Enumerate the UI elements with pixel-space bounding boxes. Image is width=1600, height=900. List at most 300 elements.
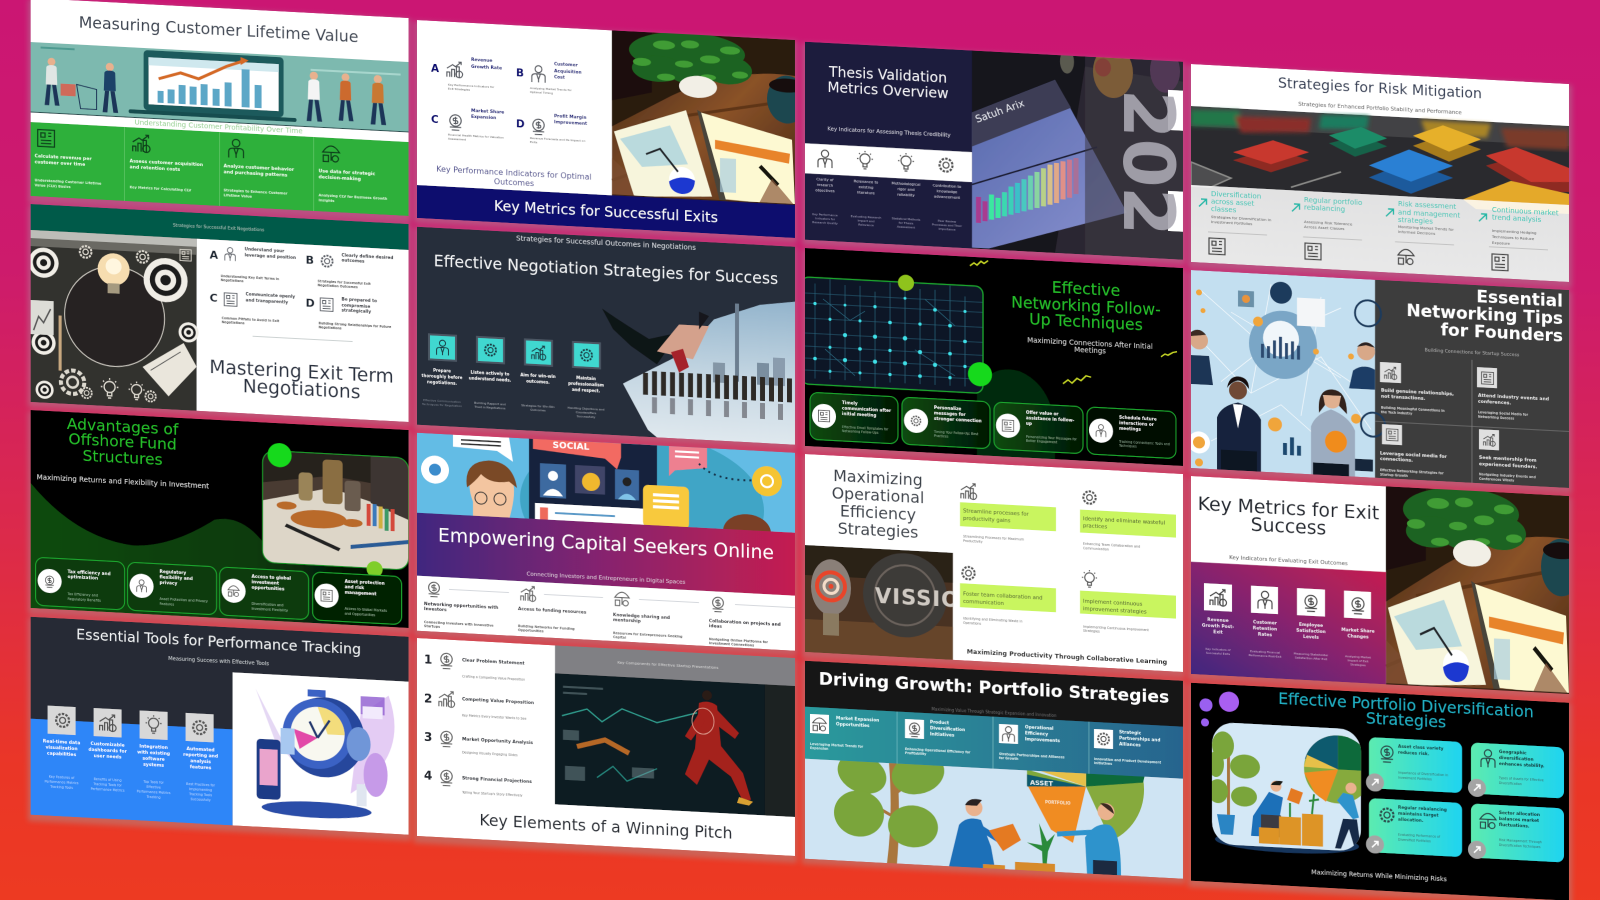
image: handshake and skyline (602, 291, 795, 445)
tools: four columns: Successfully (190, 797, 211, 802)
metrics list: D (516, 118, 525, 131)
cards: follow-up actions: meetings (1119, 426, 1141, 432)
heading: Key Elements of a Winning Pitch (479, 810, 733, 843)
image: data tablet: 202 (1107, 88, 1189, 238)
steps: four columns: Successfully (577, 414, 595, 419)
subheading: Strategies for Successful Outcomes in Negotiations (516, 234, 696, 252)
steps: four columns: understand needs. (469, 375, 512, 383)
list: negotiation points: B (306, 254, 314, 267)
cards: offshore fund benefits: management (345, 590, 376, 597)
columns: mitigation strategies: Continuous market (1492, 206, 1559, 217)
columns: four opportunities: ideas (709, 623, 722, 630)
cards: follow-up actions: Networking Follow-Ups (842, 429, 879, 435)
metrics list: C (431, 114, 439, 126)
image: target bulb and vision sign (805, 545, 959, 660)
band: four green columns: Assess customer acquisition (130, 158, 203, 168)
columns: four opportunities: mentorship (613, 617, 641, 625)
panel: Effective Portfolio Diversification Strategies (1191, 683, 1569, 900)
tools: four columns: software (142, 756, 165, 763)
band: four strategies (805, 707, 1183, 779)
columns: mitigation strategies (1199, 189, 1559, 273)
columns: criteria: Clarity of (816, 176, 834, 182)
columns: exit metrics: Customer (1253, 619, 1278, 627)
cards: follow-up actions: Tracking Connections: Tools and (1118, 440, 1170, 446)
image: target bulb and vision sign: VISSIO (875, 583, 959, 612)
cards: follow-up actions (810, 392, 1176, 459)
band: four strategies: Opportunities (836, 721, 870, 729)
subheading: Meetings (1074, 346, 1106, 355)
illustration: business people and network (1188, 270, 1385, 478)
blue block (31, 719, 233, 825)
grid: networking tips: Navigating Industry Events and (1479, 472, 1536, 479)
columns: four opportunities: Resources for Entrepreneurs Seeking (613, 631, 683, 639)
numbered list: Telling Your Startup's Story Effectively (461, 790, 522, 798)
columns: mitigation strategies: Techniques to Reduce (1491, 234, 1535, 241)
tools: four columns: reporting and (183, 752, 218, 760)
band: four green columns: decision-making (319, 174, 361, 182)
band: four strategies: Improvements (1025, 736, 1060, 744)
band: four strategies: Product (930, 719, 949, 726)
panel: Essential Networking Tips for Founders (1188, 270, 1569, 488)
cards: diversification rules: maintains target (1398, 811, 1439, 819)
columns: criteria (812, 176, 963, 232)
icon band (805, 143, 972, 182)
metrics list: Customer (554, 61, 579, 69)
heading: Effective Negotiation Strategies for Success (434, 251, 778, 288)
cards: follow-up actions: initial meeting (842, 411, 876, 418)
cards: diversification rules: allocation. (1398, 817, 1424, 824)
columns: four opportunities (424, 581, 795, 650)
columns: mitigation strategies: Risk assessment (1398, 200, 1456, 211)
illustration: growing coins and pie (1208, 722, 1372, 857)
cards: follow-up actions: Effective Email Templates for (842, 425, 889, 431)
steps: four columns: Building Rapport and (474, 401, 506, 406)
highlight boxes: improvement strategies (1083, 606, 1147, 616)
panel: Advantages of Offshore Fund Structures (31, 410, 409, 628)
columns: exit metrics: Successful Exits (1206, 651, 1230, 656)
columns: criteria: Evaluating Research (851, 214, 881, 220)
list: negotiation points: Be prepared to (342, 296, 377, 303)
cards: diversification rules: Diversified Portfolios (1398, 838, 1431, 843)
columns: mitigation strategies: across asset (1211, 198, 1255, 208)
columns: mitigation strategies: Across Asset Classes (1304, 224, 1344, 231)
subheading: Maximizing Value Through Strategic Expansion and Innovation (931, 706, 1057, 718)
illustration: laptop chart and shoppers (31, 42, 409, 132)
subheading: Strategies for Enhanced Portfolio Stability and Performance (1298, 102, 1462, 116)
tools: four columns: systems (143, 762, 164, 769)
tools: four columns (43, 705, 218, 803)
metrics list: Optimal Timing (530, 90, 553, 95)
list: negotiation points: Clearly define desired (342, 252, 393, 260)
list: negotiation points: Negotiations (222, 320, 245, 325)
list: negotiation points: outcomes (342, 257, 365, 264)
steps: four columns: Handling Objections and (568, 406, 604, 412)
columns: mitigation strategies: trend analysis (1492, 213, 1542, 224)
metrics list: Revenue Forecasts and Its Impact on (530, 136, 586, 143)
columns: exit metrics: Strategies (1350, 662, 1366, 667)
accent circles (1200, 690, 1239, 728)
image: coloured risk blocks (1191, 106, 1569, 282)
columns: criteria: Research Quality (812, 220, 838, 225)
columns: exit metrics: Impact of Exit (1348, 658, 1369, 663)
tools: four columns: Tracking Tools (49, 785, 73, 790)
cards: follow-up actions: assistance in follow- (1026, 415, 1074, 423)
columns: exit metrics (1202, 583, 1375, 668)
cards: offshore fund benefits: and risk (345, 584, 364, 591)
subheading: Connecting Investors and Entrepreneurs in Digital Spaces (527, 571, 686, 586)
panel: Effective Negotiation Strategies for Success (417, 227, 795, 445)
band: four strategies: Profitability (905, 751, 927, 756)
cards: diversification rules: balances market (1499, 816, 1539, 824)
illustration: stopwatch (233, 672, 409, 835)
band: four strategies: Initiatives (930, 731, 955, 739)
supporting notes: Productivity (963, 539, 983, 544)
band: four strategies: Strategic (1119, 729, 1142, 737)
cards: offshore fund benefits: Access to Global Markets (345, 607, 387, 613)
heading: Advantages of (67, 415, 179, 439)
metrics list: Improvement (554, 119, 587, 127)
numbered list: 3 (424, 730, 432, 744)
list: negotiation points: D (306, 297, 315, 310)
band: four green columns: and purchasing patterns (224, 169, 288, 179)
columns: mitigation strategies: rebalancing (1304, 203, 1345, 214)
columns: exit metrics: Levels (1303, 634, 1319, 641)
title band (805, 661, 1183, 727)
cards: offshore fund benefits: flexibility and (160, 574, 193, 582)
cards: offshore fund benefits: Diversification and (252, 602, 283, 607)
supporting notes: Streamlining Processes for Maximum (963, 534, 1024, 542)
list: negotiation points: Strategies for Successful Exit (318, 279, 371, 286)
metrics list: Market Share (471, 108, 504, 116)
tools: four columns: Benefits of Using (94, 777, 122, 783)
heading: Strategies (1366, 708, 1446, 732)
steps: four columns: Aim for win-win (520, 372, 556, 379)
heading: Strategies for Risk Mitigation (1278, 76, 1482, 102)
squiggles (970, 260, 1177, 390)
columns: exit metrics: Growth Post- (1202, 623, 1234, 630)
list: negotiation points: Building Strong Relationships for Future (319, 321, 391, 329)
cards: diversification rules: Evaluating Performance of (1398, 833, 1441, 839)
metrics list: Revenue (471, 57, 492, 64)
cards: diversification rules: enhances stability. (1499, 761, 1545, 769)
highlight boxes: Implement continuous (1083, 599, 1143, 608)
cards: diversification rules: Geographic (1499, 749, 1527, 756)
columns: exit metrics: Satisfaction After Exit (1295, 655, 1328, 661)
panel: Thesis Validation Metrics Overview (805, 30, 1189, 260)
steps: four columns: professionalism (568, 381, 604, 388)
cards: follow-up actions: Schedule future (1119, 415, 1157, 422)
cards: offshore fund benefits: Tax Efficiency and (67, 592, 98, 598)
metrics list: Acquisition (554, 68, 582, 76)
heading: Measuring Customer Lifetime Value (79, 13, 358, 46)
columns: four opportunities: Investors (424, 606, 447, 613)
subheading: Maximizing Connections After Initial (1027, 336, 1153, 351)
cards: follow-up actions: communication after (842, 405, 892, 413)
metrics list: Exits (530, 140, 538, 144)
columns: four opportunities: Opportunities (518, 628, 544, 633)
list: negotiation points: Negotiations (221, 278, 244, 283)
numbered list: Competing Value Proposition (462, 696, 534, 706)
columns: criteria: Contribution to (933, 182, 962, 189)
columns: mitigation strategies: Informed Decisions (1398, 229, 1435, 236)
columns: exit metrics: Rates (1258, 632, 1272, 638)
tools: four columns: Customizable (91, 741, 125, 749)
columns: four opportunities: Collaboration on projects and (709, 618, 781, 628)
image: data tablet (972, 39, 1189, 260)
panel: Driving Growth: Portfolio Strategies (805, 661, 1183, 879)
columns: criteria: Impact and (858, 218, 875, 223)
steps: four columns: and respect. (572, 387, 601, 393)
grid: networking tips: Build genuine relationships, (1381, 388, 1454, 397)
grid: networking tips: Building Meaningful Connections in (1381, 406, 1445, 413)
cards: offshore fund benefits: Access to global (252, 574, 291, 582)
columns: four opportunities: Networking opportunities with (424, 601, 498, 611)
columns: criteria: advancement (934, 194, 961, 200)
tools: four columns: Performance Metrics (137, 789, 171, 795)
columns: mitigation strategies: classes (1211, 205, 1237, 214)
cards: offshore fund benefits: Tax efficiency and (68, 569, 111, 577)
tools: four columns: Implementing (189, 787, 212, 792)
numbered list: 4 (424, 768, 432, 783)
list: negotiation points (210, 244, 393, 333)
highlight boxes: Foster team collaboration and (963, 591, 1043, 602)
image: light bulb and targets (29, 230, 199, 411)
tools: four columns: features (190, 764, 212, 771)
band: four green columns: Strategies to Enhance Customer (224, 188, 288, 196)
columns: criteria: Assessment (897, 225, 916, 230)
numbered list: 2 (424, 691, 432, 706)
metrics list: A (431, 63, 440, 75)
columns: criteria: rigor and (897, 186, 915, 192)
numbered list: Market Opportunity Analysis (462, 736, 533, 746)
cards: diversification rules: Investment Portfolios (1398, 776, 1432, 781)
panel: Maximizing Operational Efficiency Strategies (805, 454, 1183, 672)
cards: diversification rules: diversification (1499, 755, 1534, 763)
supporting notes: Operations (963, 621, 981, 626)
heading: Strategies (838, 519, 918, 542)
columns: four opportunities: Access to funding resources (518, 606, 587, 616)
cards: diversification rules: Risk Management Through (1499, 838, 1542, 844)
cards: offshore fund benefits: opportunities (252, 585, 285, 592)
metrics list: Cost (554, 74, 565, 81)
heading: Mastering Exit Term (209, 357, 394, 388)
cards: follow-up actions: Personalize (934, 405, 961, 411)
grid: networking tips: Effective Networking Strategies for (1380, 468, 1444, 475)
heading: Key Metrics for Successful Exits (494, 199, 718, 226)
supporting notes: Enhancing Team Collaboration and (1083, 542, 1140, 549)
tools: four columns: Top Tools for (142, 780, 164, 785)
band: four strategies: Innovation and Product Development (1094, 757, 1162, 765)
list: negotiation points: Common Pitfalls to Avoid in Exit (222, 316, 280, 323)
columns: mitigation strategies: strategies (1398, 216, 1433, 226)
cards: diversification rules: Diversification Techniques (1499, 843, 1541, 849)
cards: diversification rules: Regular rebalancing (1398, 805, 1447, 813)
band: four strategies: Efficiency (1025, 730, 1048, 738)
illustration: social media people: SOCIAL (553, 441, 590, 453)
tools: four columns: Effective (146, 785, 161, 790)
columns: mitigation strategies: and management (1398, 208, 1460, 220)
heading: Up Techniques (1029, 309, 1143, 334)
subheading: Measuring Success with Effective Tools (168, 656, 269, 667)
numbered list (424, 652, 534, 798)
panel: Essential Tools for Performance Tracking (31, 617, 409, 835)
cards: follow-up actions: messages for (934, 410, 966, 417)
numbered list: Crafting a Compelling Value Proposition (462, 674, 525, 682)
illustration: watering plants and pie chart: PORTFOLIO (1045, 799, 1071, 806)
heading: Operational (832, 483, 924, 507)
heading: Key Metrics for Exit (1198, 494, 1379, 524)
heading: Maximizing (833, 466, 923, 490)
columns: exit metrics: Analyzing Market (1345, 654, 1372, 660)
steps: four columns: Maintain (576, 375, 596, 381)
columns: criteria: Methodological (892, 180, 920, 187)
metrics list: Assessment (448, 137, 467, 142)
grid: networking tips: Conferences Wisely (1479, 477, 1515, 483)
image: coins and jars (263, 450, 409, 570)
cards: follow-up actions: up (1026, 421, 1032, 426)
tools: four columns: Key Features of (49, 775, 75, 780)
metrics list (431, 55, 587, 148)
columns: four opportunities: Startups (424, 624, 440, 629)
cards: offshore fund benefits: privacy (160, 580, 178, 587)
panel: Key Metrics for Successful Exits (417, 18, 807, 239)
grid: networking tips: not transactions. (1381, 394, 1426, 402)
footer band (417, 185, 795, 238)
heading: Networking Tips (1406, 301, 1563, 329)
band: four strategies: Market Expansion (836, 715, 879, 724)
metrics list: B (516, 67, 524, 80)
band: four green columns: Analyze customer behavior (224, 163, 295, 173)
band: four green columns: Use data for strategic (319, 168, 376, 177)
tools: four columns: visualization (46, 744, 78, 752)
steps: four columns: Trust in Negotiations (474, 405, 506, 410)
accent circles (898, 274, 992, 387)
panel: Measuring Customer Lifetime Value (31, 0, 409, 216)
grid: networking tips: the Tech Industry (1381, 410, 1413, 416)
cards: follow-up actions: stronger connection (934, 416, 982, 423)
icons (961, 483, 1097, 588)
supporting notes: Implementing Continuous Improvement (1083, 625, 1149, 632)
subheading: Maximizing Returns and Flexibility in Investment (37, 472, 209, 490)
numbered list: Designing Visually Engaging Slides (462, 750, 518, 757)
grid: networking tips: Startup Growth (1380, 473, 1409, 478)
cards: offshore fund benefits: optimization (68, 574, 98, 582)
cards: diversification rules (1366, 737, 1564, 863)
subheading: Understanding Customer Profitability Over Time (135, 119, 303, 135)
image: notebook and plant (1386, 484, 1581, 734)
illustration: social media people (417, 432, 795, 533)
list: negotiation points: Communicate openly (246, 291, 295, 299)
grid: networking tips: Networking Success (1478, 415, 1514, 421)
tools: four columns: user needs (94, 753, 122, 761)
columns: criteria: Indicators for (815, 216, 836, 221)
tools: four columns: Performance Metrics (45, 779, 79, 785)
band: four green columns (31, 122, 409, 216)
cards: follow-up actions: Timely (842, 400, 858, 406)
cards: offshore fund benefits (36, 557, 402, 625)
grid: networking tips: experienced founders. (1479, 461, 1537, 470)
cards: follow-up actions: interactions or (1119, 420, 1155, 427)
band: four green columns: Analyzing CLV for Business Growth (319, 193, 388, 201)
panel: Key Elements of a Winning Pitch (417, 638, 795, 856)
highlight boxes (960, 502, 1176, 619)
columns: mitigation strategies: Monitoring Market Trends for (1398, 224, 1454, 232)
heading: Driving Growth: Portfolio Strategies (819, 669, 1169, 708)
cards: follow-up actions: Offer value or (1026, 410, 1059, 416)
subheading: Key Performance Indicators for Optimal (436, 165, 592, 182)
steps: four columns: Techniques for Negotiation (421, 402, 462, 408)
band: four green columns: Understanding Customer Lifetime (35, 178, 102, 186)
metrics list: Profit Margin (554, 113, 587, 121)
columns: criteria: Processes and Their (932, 222, 963, 228)
band: four strategies: Expansion (810, 746, 829, 751)
columns: criteria: Importance (938, 227, 956, 232)
cards: diversification rules: fluctuations. (1499, 822, 1530, 830)
heading: Thesis Validation (828, 64, 947, 87)
band: four green columns: and retention costs (130, 164, 180, 173)
cards: offshore fund benefits: Asset Protection and Privacy (160, 597, 208, 603)
heading: Efficiency (840, 501, 916, 524)
tools: four columns: Real-time data (43, 738, 80, 746)
list: negotiation points: A (210, 248, 219, 262)
list: negotiation points: C (210, 291, 218, 305)
panel: Mastering Exit Term Negotiations (29, 204, 409, 422)
metrics list: Growth Rate (471, 64, 502, 71)
columns: mitigation strategies: Strategies for Diversification in (1211, 214, 1272, 222)
metrics list: Exit Strategies (448, 87, 470, 92)
metrics list: Key Performance Indicators for (448, 83, 495, 89)
heading: for Founders (1441, 320, 1563, 347)
steps: four columns: Strategies for Win-Win (521, 403, 555, 409)
image: runner and data screens (555, 673, 795, 817)
heading: Effective (1052, 278, 1120, 300)
band: four green columns: customer over time (35, 159, 85, 168)
subheading: Maximizing Returns While Minimizing Risks (1311, 869, 1447, 883)
highlight boxes: Streamline processes for (963, 508, 1030, 518)
columns: criteria: literature (857, 189, 875, 195)
cards: offshore fund benefits: Regulatory Benefits (68, 597, 101, 603)
band: four strategies: Initiatives (1094, 761, 1112, 766)
columns: criteria: Peer Review (938, 219, 957, 224)
panel: Strategies for Risk Mitigation (1191, 64, 1569, 282)
illustration: watering plants and pie chart: ASSET (1030, 779, 1054, 788)
cards: offshore fund benefits: investment (252, 579, 279, 587)
gradient block (1191, 562, 1386, 684)
columns: mitigation strategies: Assessing Risk Tolerance (1304, 219, 1353, 227)
columns: four opportunities: Navigating Online Platforms for (709, 637, 768, 644)
cards: diversification rules: Asset class variety (1398, 744, 1444, 752)
columns: four opportunities: Investment Connections (709, 641, 754, 648)
columns: exit metrics: Market Share (1341, 627, 1375, 635)
tools: four columns: Performance Metrics (91, 787, 125, 793)
cards: diversification rules: reduces risk. (1398, 750, 1430, 757)
subheading: Strategies for Successful Exit Negotiations (173, 223, 265, 233)
columns: criteria: reliability (897, 192, 916, 198)
subheading: Building Connections for Startup Success (1425, 347, 1520, 358)
columns: criteria: Relevance (858, 223, 874, 227)
panel: Effective Networking Follow-Up Techniques (801, 248, 1183, 466)
heading: Empowering Capital Seekers Online (438, 525, 774, 564)
tools: four columns: analysis (190, 758, 211, 765)
highlight boxes: practices (1083, 523, 1107, 530)
title band (417, 513, 795, 596)
steps: four columns: Outcomes (530, 408, 546, 413)
band: four strategies: Strategic Partnerships and Alliances (999, 752, 1065, 759)
columns: exit metrics: Evaluating Financial (1250, 649, 1280, 655)
heading: Structures (83, 447, 163, 469)
columns: criteria: Statistical Methods (892, 216, 921, 222)
tools: four columns: Integration (139, 743, 168, 751)
